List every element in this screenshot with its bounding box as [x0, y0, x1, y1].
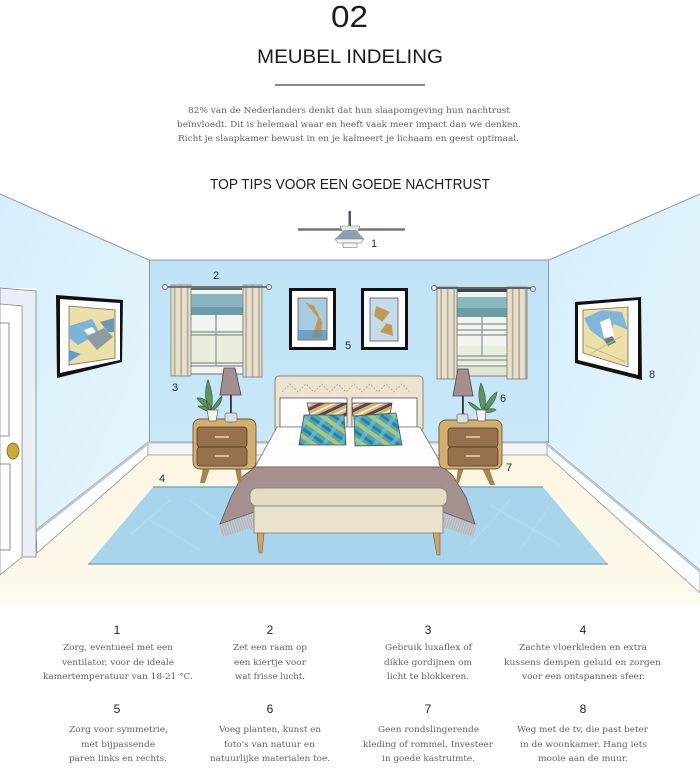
tip 7: kleding of rommel. Investeer [363, 739, 493, 749]
number markers: 8 [649, 369, 655, 381]
tip 6 [210, 702, 330, 763]
tip 4: 4 [580, 623, 587, 637]
throw blanket [220, 467, 475, 524]
tip 7: 7 [425, 702, 432, 716]
bedroom illustration [0, 194, 700, 607]
tip 6: natuurlijke materialen toe. [210, 753, 330, 763]
tip 8: in de woonkamer. Hang iets [520, 739, 647, 749]
tip 5: paren links en rechts. [69, 753, 167, 763]
tip 7 [363, 702, 493, 763]
intro paragraph: 82% van de Nederlanders denkt dat hun slaapomgeving hun nachtrust [188, 105, 511, 115]
curtains left window [171, 285, 191, 376]
number markers [159, 238, 655, 485]
number markers: 6 [500, 393, 506, 405]
intro paragraph [177, 105, 521, 143]
tip 5: 5 [114, 702, 121, 716]
lamp left [220, 368, 241, 422]
intro paragraph: Richt je slaapkamer bewust in en je kalmeert je lichaam en geest optimaal. [178, 133, 519, 143]
door [0, 288, 36, 575]
tip 3: 3 [425, 623, 432, 637]
tip 1: kamertemperatuur van 18-21 °C. [43, 671, 193, 681]
title divider [275, 84, 425, 86]
tip 6: Voeg planten, kunst en [218, 724, 322, 734]
nightstand right [439, 420, 502, 485]
tip 1: 1 [114, 623, 121, 637]
lamp right [453, 369, 473, 423]
tip 3: Gebruik luxaflex of [385, 642, 473, 652]
ceiling fan [298, 211, 405, 248]
plant left [197, 380, 222, 421]
number markers: 3 [172, 382, 178, 394]
number markers: 5 [345, 340, 351, 352]
intro paragraph: beïnvloedt. Dit is helemaal waar en heeft vaak meer impact dan we denken. [177, 119, 521, 129]
window right [432, 286, 536, 379]
tip 5 [69, 702, 168, 763]
duvet [255, 427, 443, 467]
tip 7: Geen rondslingerende [378, 724, 479, 734]
tip 1: Zorg, eventueel met een [63, 642, 174, 652]
tip 6: foto's van natuur en [224, 739, 316, 749]
rug [88, 487, 608, 564]
title: MEUBEL INDELING [257, 46, 443, 68]
right wall [549, 194, 700, 570]
accent pillows [307, 403, 347, 416]
tip 3: dikke gordijnen om [384, 657, 472, 667]
number markers: 7 [506, 462, 512, 474]
tip 7: in goede kastruimte. [382, 753, 475, 763]
tip 8: mooie aan de muur. [538, 753, 628, 763]
tip 2 [233, 623, 307, 681]
curtains right window [437, 287, 457, 379]
tip 1: ventilator, voor de ideale [61, 657, 174, 667]
headboard [275, 376, 423, 432]
bench [250, 488, 447, 506]
tip 6: 6 [267, 702, 274, 716]
number markers: 2 [213, 270, 219, 282]
tip 2: 2 [267, 623, 274, 637]
tip 3 [384, 623, 473, 681]
tip 3: licht te blokkeren. [387, 671, 469, 681]
tip 8 [517, 702, 648, 763]
tip 5: Zorg voor symmetrie, [69, 724, 168, 734]
number markers: 4 [159, 473, 165, 485]
picture back wall left [289, 288, 336, 350]
tip 1 [43, 623, 193, 681]
tip 2: een kiertje voor [234, 657, 306, 667]
tip 8: Weg met de tv, die past beter [517, 724, 648, 734]
subheading: TOP TIPS VOOR EEN GOEDE NACHTRUST [210, 177, 490, 193]
tip 2: Zet een raam op [233, 642, 307, 652]
tip 2: wat frisse lucht. [235, 671, 305, 681]
picture left wall [56, 295, 123, 378]
plant right [468, 383, 497, 421]
fringe [221, 520, 475, 530]
number markers: 1 [371, 238, 377, 250]
nightstand left [193, 419, 256, 483]
section number: 02 [331, 0, 368, 34]
back pillows [280, 398, 347, 427]
tip 4 [504, 623, 662, 681]
door knob [7, 443, 19, 459]
picture right wall [575, 297, 642, 380]
floor [0, 455, 700, 607]
tip 4: kussens dempen geluid en zorgen [504, 657, 662, 667]
tip 4: Zachte vloerkleden en extra [519, 642, 647, 652]
picture back wall right [361, 288, 408, 350]
baseboards [36, 441, 700, 593]
back wall [150, 260, 548, 442]
window left [162, 284, 272, 377]
left wall [0, 194, 149, 530]
tip 4: voor een ontspannen sfeer. [521, 671, 645, 681]
bed [220, 376, 475, 555]
tip 5: met bijpassende [81, 739, 155, 749]
tip 8: 8 [580, 702, 587, 716]
